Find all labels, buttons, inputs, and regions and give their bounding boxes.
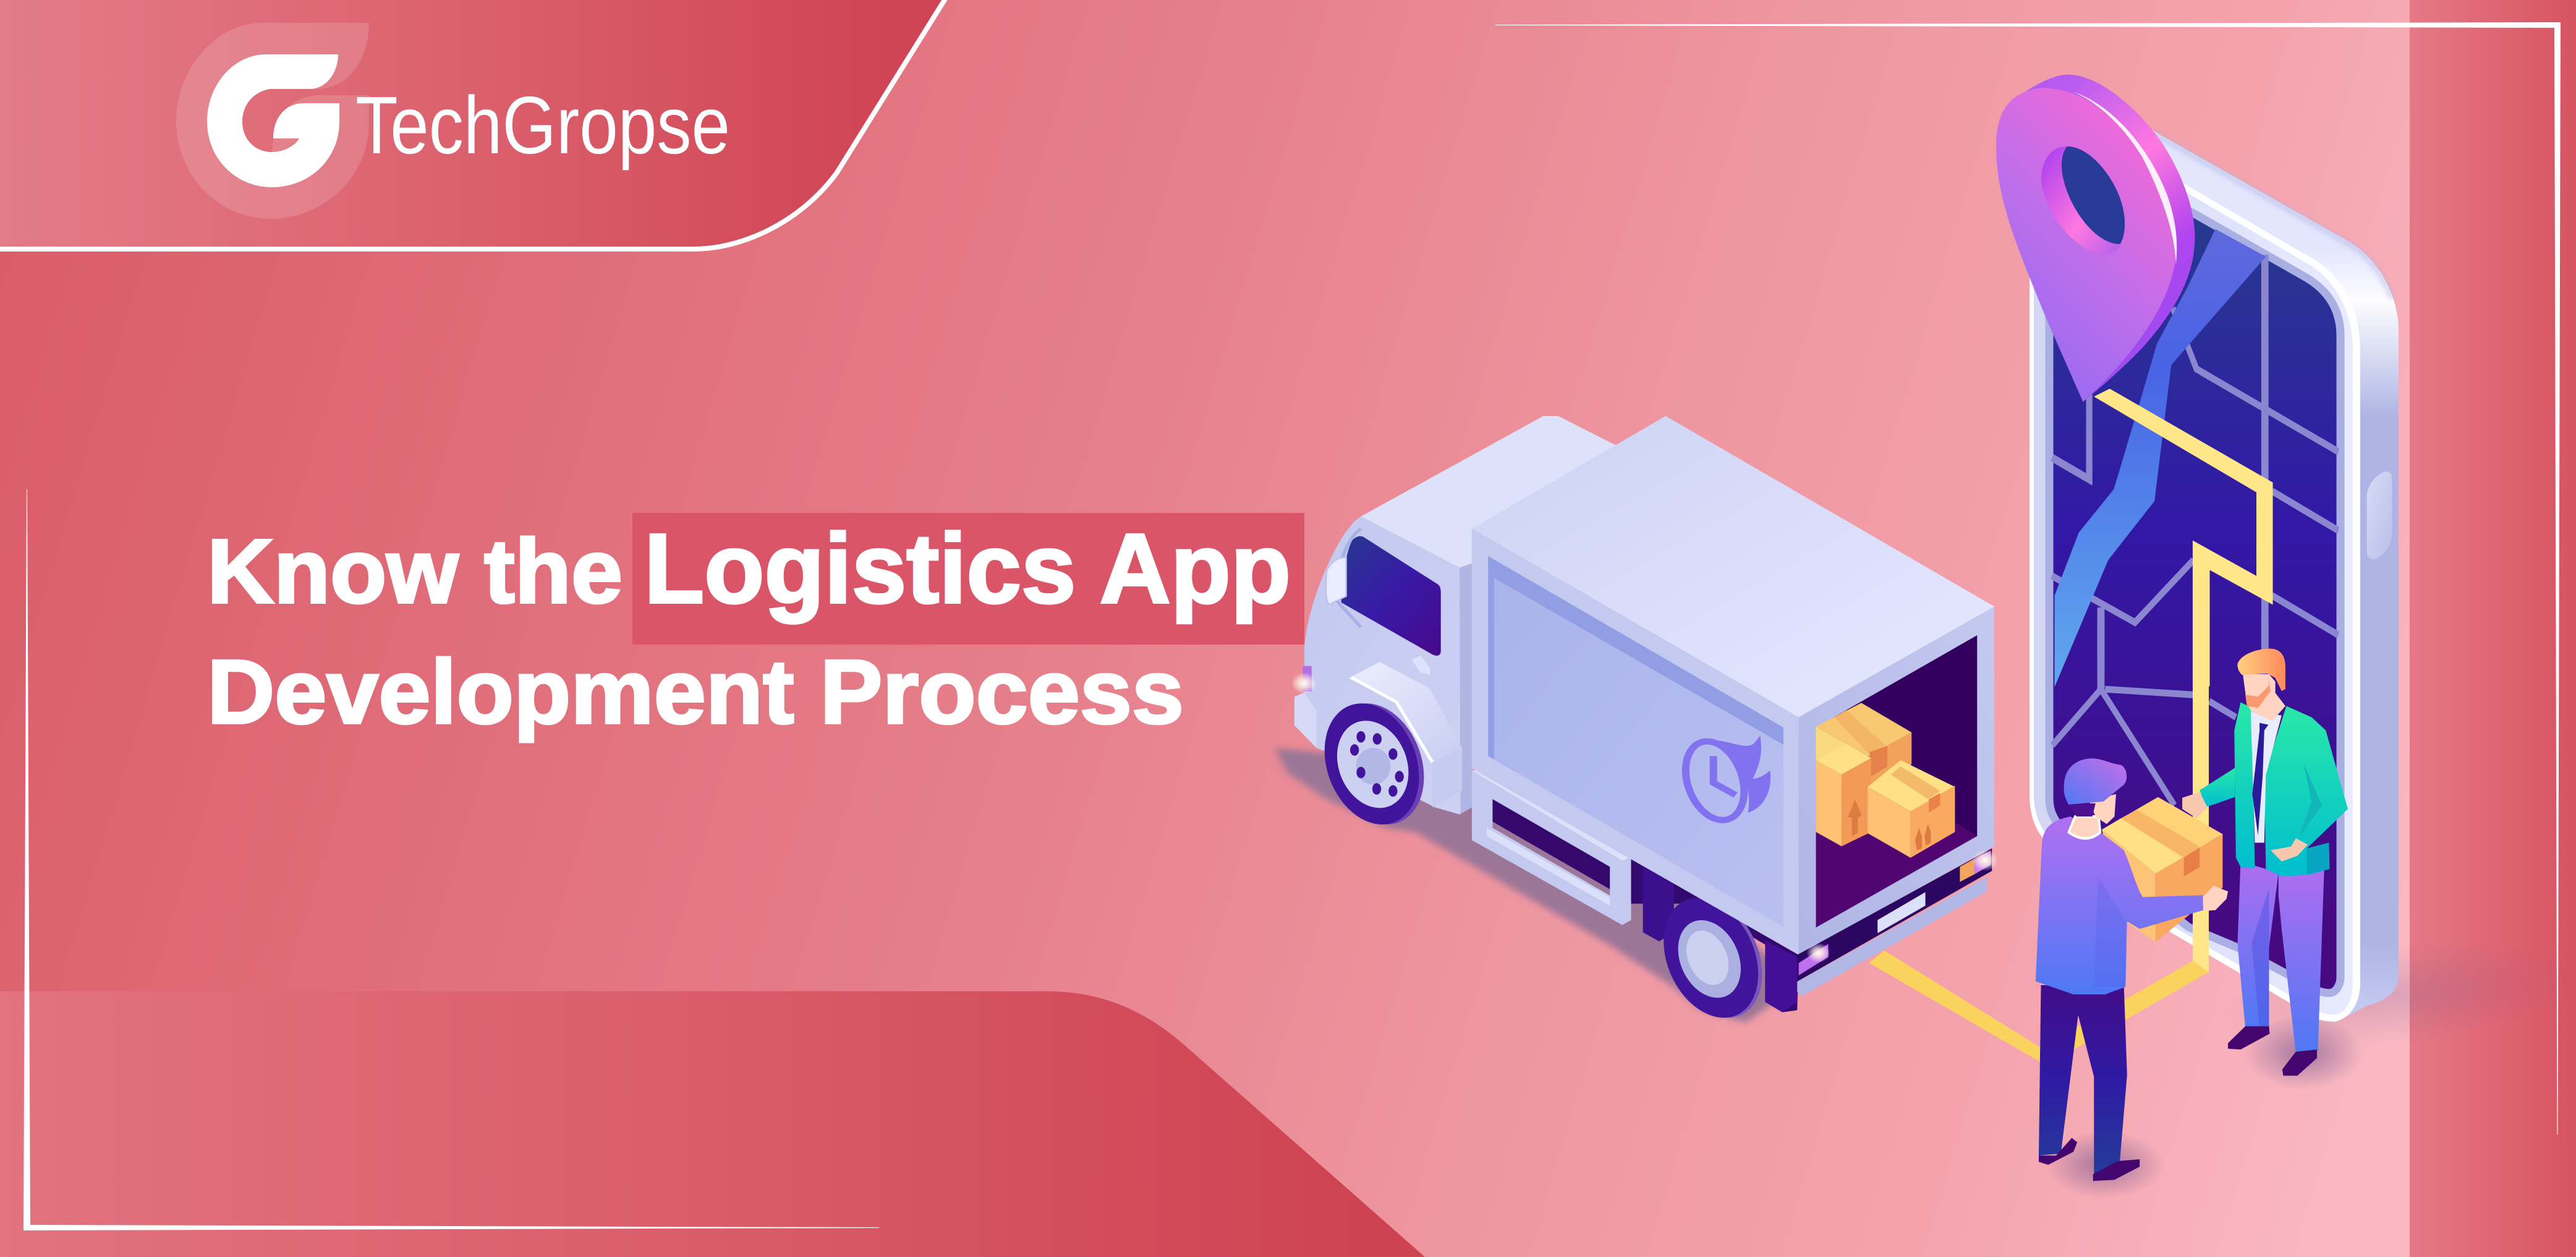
figures shadows: [2045, 1015, 2363, 1198]
location pin: [1996, 75, 2195, 402]
courier neck: [2068, 816, 2100, 839]
pin side: [2026, 75, 2195, 402]
floor route line: [1869, 950, 2209, 1065]
title: Logistics App: [644, 513, 1291, 624]
parcel: [2102, 797, 2222, 942]
courier hand: [2203, 886, 2228, 911]
top-left logo panel: [0, 0, 945, 249]
truck: [1275, 416, 1998, 1027]
map roads lower: [2052, 618, 2265, 805]
jacket folds: [2299, 764, 2329, 874]
highlight box behind Logistics App: [632, 513, 1304, 645]
man hands: [2182, 792, 2308, 861]
chassis step: [1643, 867, 1674, 941]
man shoes: [2228, 1026, 2317, 1076]
phone top edge shade: [2153, 133, 2392, 299]
courier shirt fold: [2094, 876, 2125, 987]
fender top: [1349, 662, 1462, 762]
headlight: [1291, 666, 1317, 694]
cargo rear frame: [1799, 606, 1994, 955]
phone shadow: [2215, 927, 2576, 1063]
bottom-left panel: [0, 991, 1425, 1257]
man in green jacket: [2182, 649, 2348, 1076]
cab rear strip: [1460, 564, 1472, 813]
phone body: [2030, 130, 2399, 1023]
boxes in truck: [1816, 703, 1955, 858]
phone inner band: [2034, 111, 2353, 1015]
logo wordmark: TechGropse: [355, 80, 730, 171]
man beard: [2245, 674, 2271, 708]
rear fender: [1765, 941, 1797, 1012]
courier hair: [2067, 803, 2096, 816]
rear lights: [1799, 850, 1998, 975]
bumper: [1294, 693, 1317, 748]
cargo floor: [1816, 824, 1977, 928]
rear bumper band: [1797, 849, 1992, 981]
map river: [2054, 229, 2266, 687]
courier trousers: [2039, 985, 2127, 1174]
front wheel: [1311, 695, 1437, 832]
man shirt: [2251, 712, 2282, 843]
cab roof: [1361, 416, 1642, 568]
pin hole: [2062, 146, 2125, 244]
courier shirt: [2036, 816, 2203, 994]
man trousers: [2237, 861, 2324, 1052]
phone screen: [2049, 154, 2340, 993]
cargo roof: [1472, 416, 1994, 717]
side toolbox: [1472, 771, 1631, 925]
logo halo: [176, 23, 369, 219]
panel outline: [0, 0, 946, 249]
cargo interior: [1816, 635, 1977, 928]
phone white frame: [2030, 105, 2360, 1022]
underbody: [1631, 858, 1799, 1012]
pin highlight: [2073, 92, 2177, 265]
courier shoes: [2039, 1138, 2140, 1181]
title: Know the: [207, 521, 623, 622]
route on screen: [2094, 389, 2273, 972]
phone side button: [2367, 472, 2392, 559]
courier cap: [2064, 758, 2127, 805]
right colour strip: [2410, 0, 2576, 1257]
phone: [2030, 105, 2399, 1023]
rear bumper: [1797, 877, 1987, 996]
cargo side panel: [1488, 556, 1783, 927]
cab window surround: [1337, 529, 1361, 627]
delivery man: [2036, 758, 2228, 1181]
truck clock logo: [1677, 735, 1770, 825]
logo mark G: [207, 54, 339, 187]
cab mirror: [1326, 557, 1346, 604]
fender lower: [1432, 748, 1462, 807]
title: Development Process: [207, 641, 1184, 743]
pin face: [1996, 88, 2176, 402]
man jacket: [2200, 702, 2348, 876]
cab window: [1341, 536, 1441, 656]
trouser shading: [2251, 887, 2269, 1028]
door handle: [1412, 656, 1430, 675]
fender highlight: [1351, 677, 1432, 762]
man hair: [2237, 649, 2285, 691]
pin hole rim: [2041, 146, 2121, 255]
truck shadow: [1275, 748, 1785, 1023]
number plate: [1877, 892, 1926, 933]
title: [207, 513, 1291, 743]
logo: TechGropse: [176, 23, 730, 219]
man face: [2243, 674, 2285, 721]
rear wheel: [1648, 889, 1778, 1027]
cab body: [1294, 517, 1472, 815]
cargo side stripe: [1488, 556, 1783, 760]
cargo side: [1472, 529, 1799, 955]
courier face: [2089, 794, 2116, 824]
man tie: [2252, 723, 2268, 836]
map roads upper: [2052, 255, 2339, 674]
